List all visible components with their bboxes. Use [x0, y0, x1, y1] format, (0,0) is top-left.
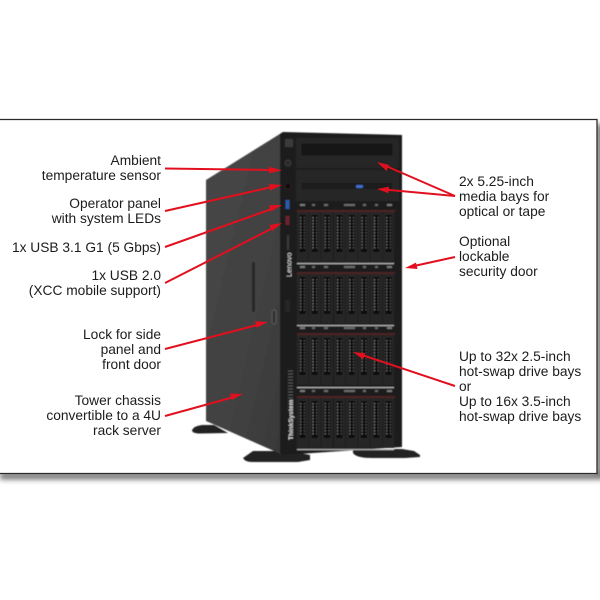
label: ambient temperature sensor: Ambient [111, 153, 161, 168]
label: tower chassis: Tower chassis [75, 393, 161, 408]
ThinkSystem mark: ThinkSystem [288, 399, 295, 440]
arrow: media bay lower [377, 187, 455, 196]
label: drive bays: or [459, 379, 472, 394]
operator button [285, 183, 291, 189]
side panel slot [252, 262, 255, 312]
operator column [284, 139, 295, 440]
label: drive bays: Up to 16x 3.5-inch [459, 394, 571, 409]
label: operator panel: Operator panel [69, 196, 161, 211]
arrow: USB 2.0 [165, 223, 282, 283]
side panel [206, 132, 283, 455]
label: lock: Lock for side [83, 327, 161, 342]
label: lock: front door [102, 357, 161, 372]
label: media bays: 2x 5.25-inch [459, 174, 534, 189]
blue indicator [356, 185, 363, 188]
label: media bays: optical or tape [459, 204, 546, 219]
front left foot [243, 451, 310, 462]
media bays [296, 138, 399, 201]
rear foot [192, 425, 228, 434]
arrow: media bay upper [377, 162, 455, 196]
USB 3.1 port [286, 200, 290, 209]
panel frame [0, 120, 597, 474]
arrow: lock [165, 321, 268, 349]
arrow: ambient sensor [165, 167, 282, 173]
side panel lock [272, 310, 276, 324]
front bezel [280, 132, 402, 455]
label: USB 2.0: 1x USB 2.0 [91, 268, 161, 283]
arrow: drive bays [353, 352, 455, 386]
arrow: tower chassis [165, 394, 243, 416]
label: drive bays: hot-swap drive bays [459, 364, 581, 379]
label: lock: panel and [101, 342, 161, 357]
label: media bays: media bays for [459, 189, 550, 204]
arrow: operator panel [165, 184, 282, 211]
vents [288, 371, 293, 410]
label: security door: lockable [459, 249, 510, 264]
server illustration [192, 132, 420, 462]
label: ambient temperature sensor: temperature sensor [42, 168, 161, 183]
Lenovo mark: Lenovo [284, 252, 294, 277]
label: security door: security door [459, 264, 538, 279]
label: operator panel: with system LEDs [51, 211, 161, 226]
label: drive bays: Up to 32x 2.5-inch [459, 349, 571, 364]
label: USB 2.0: (XCC mobile support) [29, 283, 161, 298]
front right foot [353, 449, 420, 458]
USB 2.0 port [286, 216, 290, 225]
arrow: security door [405, 257, 455, 269]
label: USB 3.1: 1x USB 3.1 G1 (5 Gbps) [12, 240, 161, 255]
ambient sensor [285, 160, 291, 166]
panel shadow [0, 124, 600, 476]
label: security door: Optional [459, 234, 510, 249]
drive bays [297, 204, 395, 450]
label: drive bays: hot-swap drive bays [459, 409, 581, 424]
arrow: USB 3.1 [165, 205, 282, 247]
label: tower chassis: convertible to a 4U [46, 408, 161, 423]
label: tower chassis: rack server [93, 423, 161, 438]
